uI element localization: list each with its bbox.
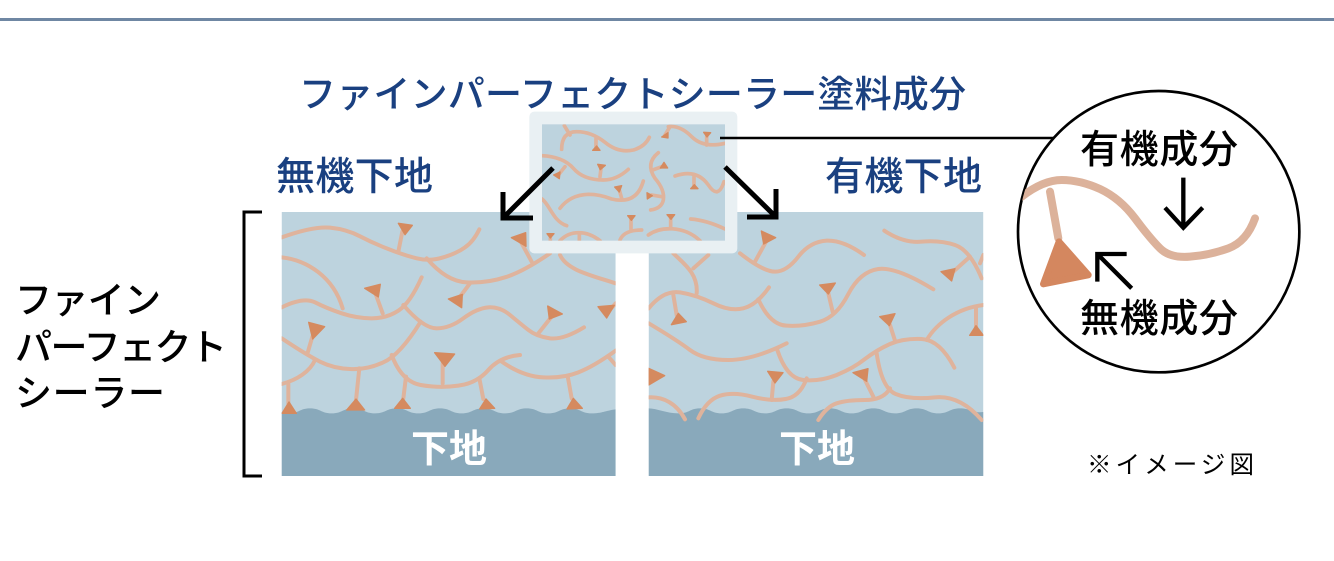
leader line	[720, 137, 1055, 139]
arrow: organic	[1165, 178, 1203, 228]
heading: inorganic substrate: 無機下地	[276, 156, 433, 199]
title: ファインパーフェクトシーラー塗料成分	[299, 74, 966, 115]
sample fill	[542, 124, 725, 241]
sample frame	[529, 112, 737, 253]
arrow: to organic substrate	[725, 167, 776, 217]
note: ※イメージ図	[1087, 452, 1254, 479]
arrow: inorganic	[1097, 254, 1132, 288]
label: inorganic component: 無機成分	[1080, 298, 1238, 341]
panel: sealer paint components	[529, 112, 737, 253]
callout circle	[1018, 91, 1299, 372]
label: organic component: 有機成分	[1080, 129, 1238, 172]
label: fine perfect sealer: ファイン	[15, 280, 161, 321]
inorganic particles	[282, 223, 614, 413]
polymer chains	[649, 231, 983, 420]
organic chain	[1022, 180, 1255, 257]
polymer chains	[282, 227, 616, 403]
bracket	[244, 212, 262, 476]
substrate base with wave	[649, 408, 983, 476]
top rule	[0, 18, 1334, 21]
label: fine perfect sealer: パーフェクト	[15, 327, 227, 368]
substrate label right: 下地	[779, 429, 855, 471]
label: fine perfect sealer	[15, 280, 227, 414]
sample chains and particles	[542, 126, 725, 241]
heading: organic substrate: 有機下地	[825, 156, 982, 199]
substrate base with wave	[282, 408, 616, 476]
panel: inorganic substrate	[282, 212, 616, 476]
arrow: to inorganic substrate	[503, 168, 553, 218]
inorganic particle	[1043, 242, 1088, 284]
inorganic particles	[649, 231, 983, 385]
label: fine perfect sealer: シーラー	[15, 373, 165, 414]
panel: organic substrate	[649, 212, 983, 476]
substrate label left: 下地	[411, 429, 487, 471]
circle outline	[1018, 91, 1299, 372]
